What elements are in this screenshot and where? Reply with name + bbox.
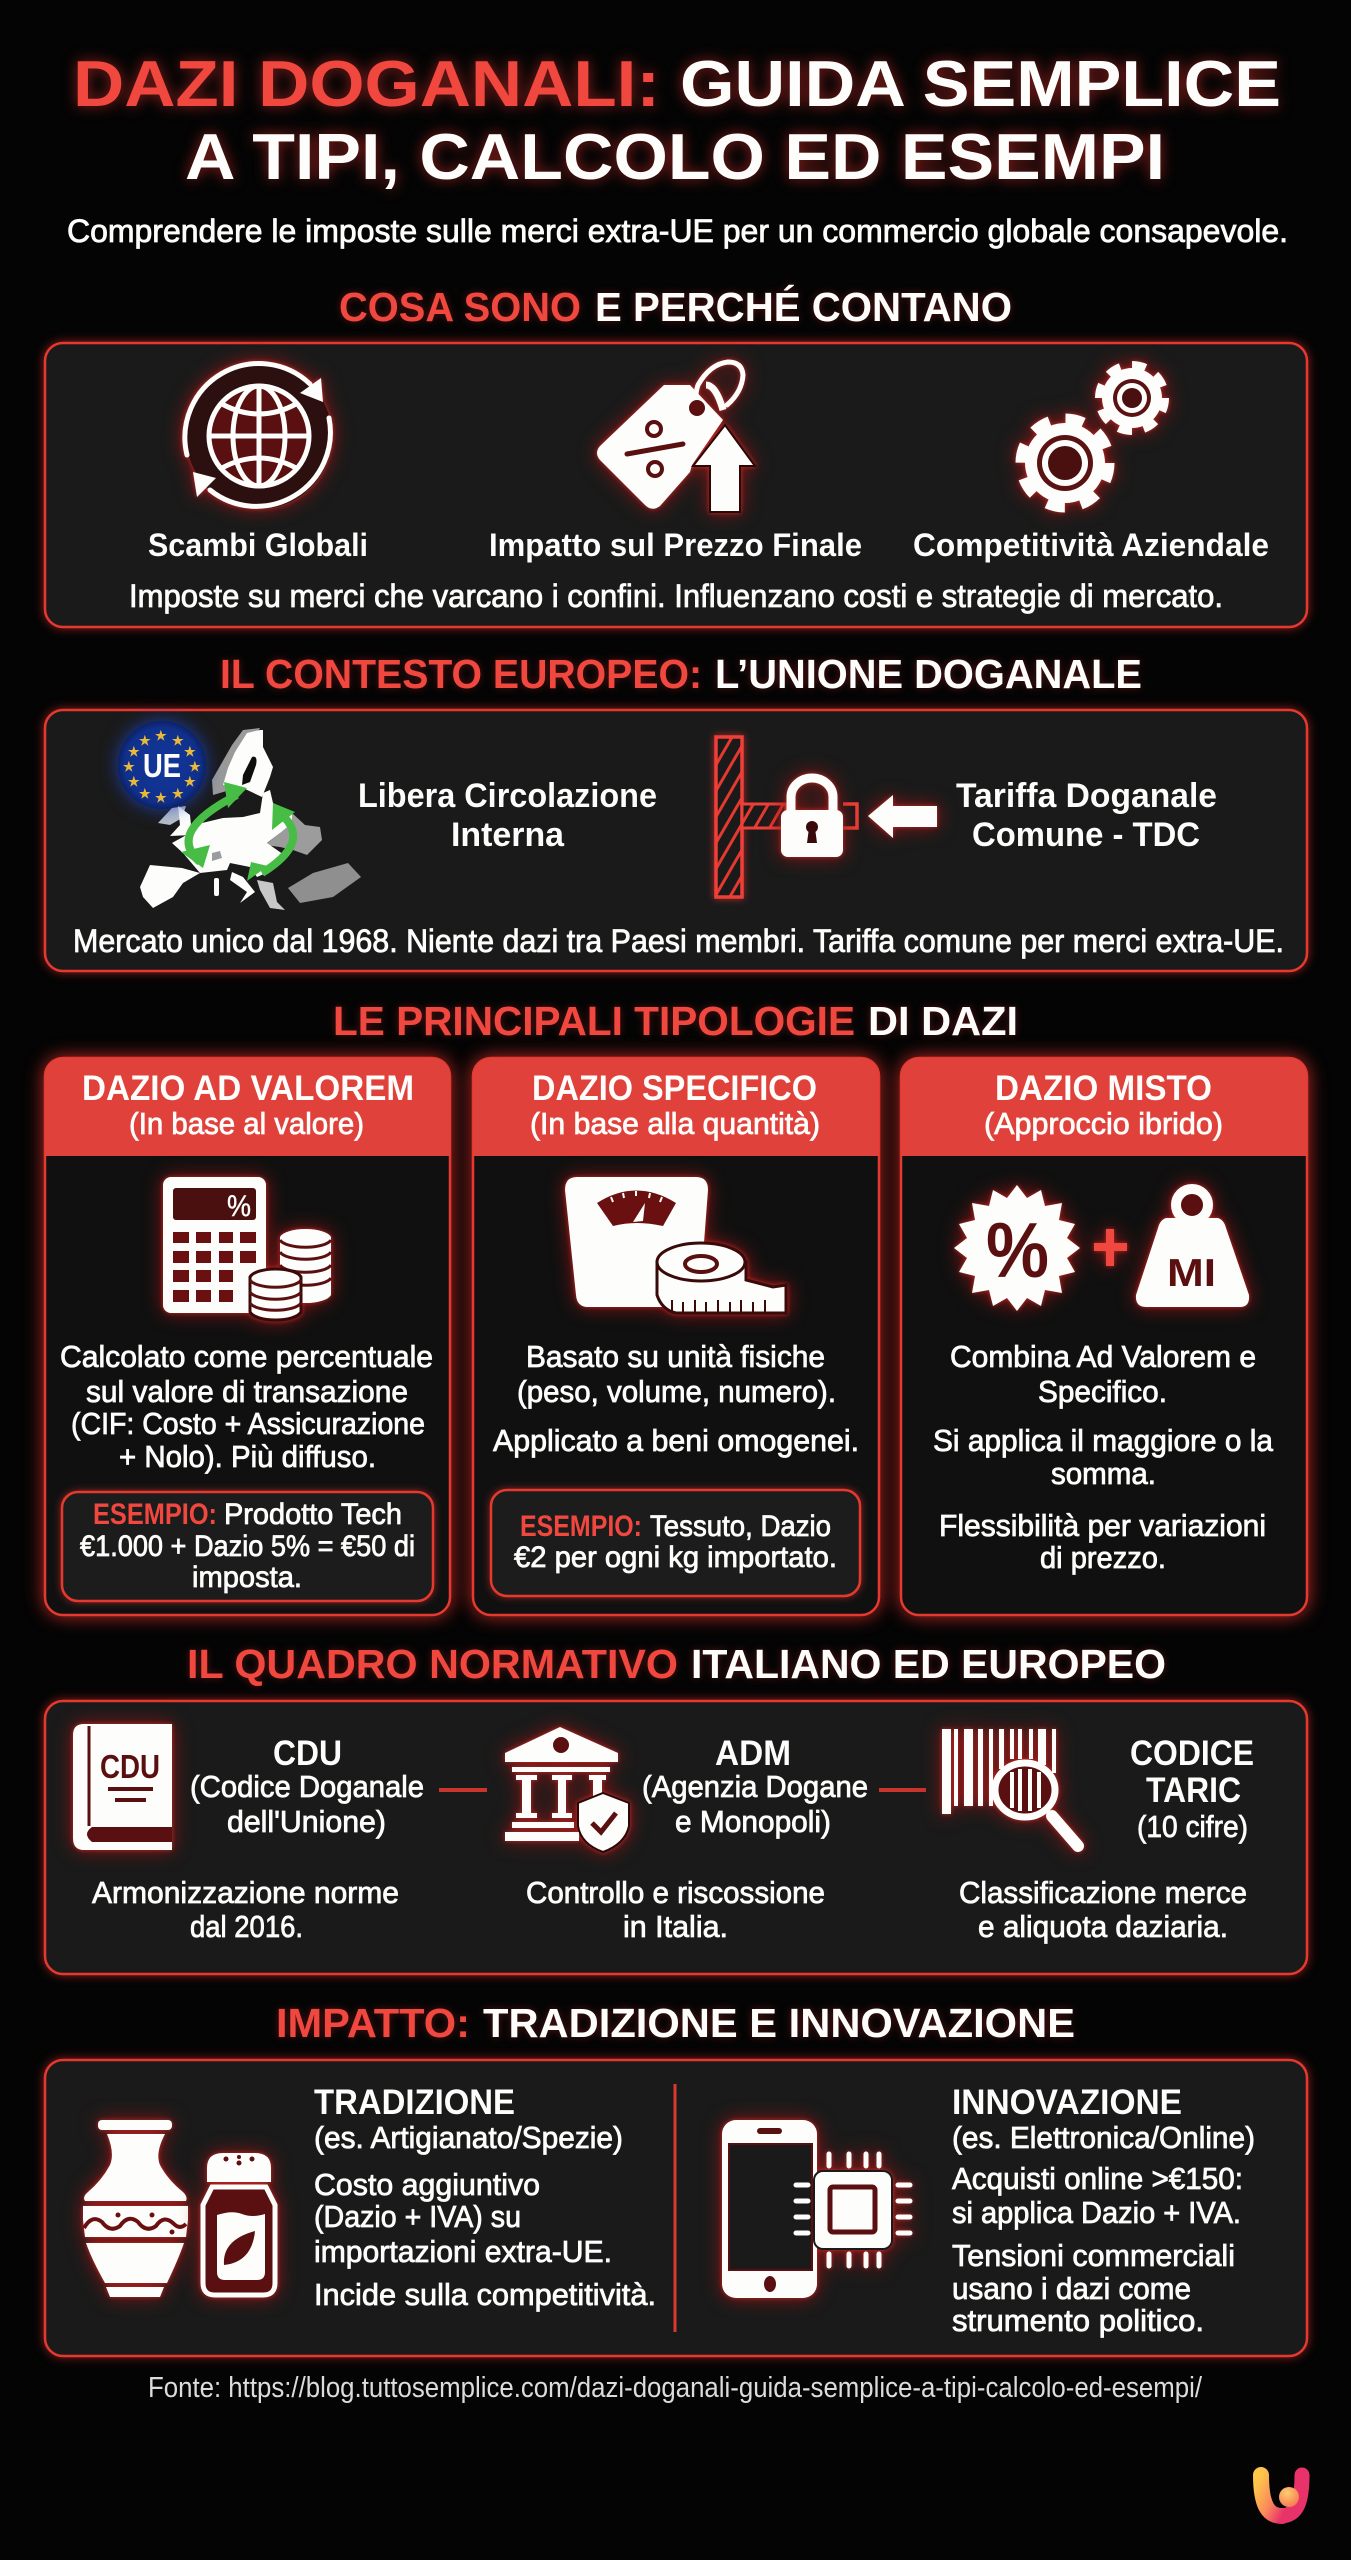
description: CDU: Armonizzazione norme	[92, 1875, 399, 1910]
text: CDU: CDU	[273, 1734, 342, 1773]
body text: Flessibilità per variazioni	[939, 1508, 1266, 1543]
heading: contesto europeo	[220, 651, 1142, 697]
text: innovazione: Tensioni commerciali	[952, 2238, 1235, 2273]
card header: (In base alla quantità)	[530, 1106, 820, 1141]
title	[73, 47, 1281, 193]
icon: eu flag: ★	[128, 774, 140, 789]
body text: Calcolato come percentuale	[60, 1339, 433, 1374]
heading: quadro normativo: IL QUADRO NORMATIVO	[187, 1641, 678, 1687]
card header: (In base al valore)	[129, 1106, 364, 1141]
heading: cosa sono: COSA SONO	[339, 284, 581, 330]
text: CDU	[190, 1734, 424, 1839]
text: libera circolazione: Interna	[451, 816, 565, 854]
card: dazio specifico	[473, 1058, 879, 1615]
description: TARIC	[959, 1875, 1247, 1944]
description: CDU	[92, 1875, 399, 1944]
icon: smartphone with chip	[722, 2120, 910, 2298]
panel: contesto europeo	[45, 710, 1307, 971]
icon: price tag with arrow	[597, 362, 755, 512]
heading: quadro normativo	[187, 1641, 1166, 1687]
card: dazio misto	[901, 1058, 1307, 1615]
icon: globe with arrows	[185, 363, 332, 509]
text: codice TARIC: (10 cifre)	[1137, 1809, 1248, 1844]
example box: €1.000 + Dazio 5% = €50 di	[80, 1530, 415, 1563]
text: innovazione: si applica Dazio + IVA.	[952, 2195, 1241, 2230]
icon: green circulation arrows	[181, 782, 295, 881]
icon: percent badge plus weight: %	[986, 1206, 1049, 1294]
heading: tipologie: LE PRINCIPALI TIPOLOGIE	[333, 998, 855, 1044]
icon: eu flag: ★	[123, 759, 135, 774]
icon: customs building with shield	[505, 1727, 629, 1852]
card header: DAZIO SPECIFICO	[532, 1069, 817, 1108]
icon: percent badge plus weight	[954, 1185, 1249, 1311]
text: ADM: ADM	[715, 1734, 791, 1773]
icon: barrier with lock	[716, 737, 937, 897]
icon: CDU book: CDU	[100, 1748, 160, 1785]
text: codice TARIC: TARIC	[1146, 1771, 1241, 1810]
panel: impatto	[45, 2060, 1307, 2356]
text: innovazione	[952, 2083, 1255, 2338]
text: tradizione: Incide sulla competitività.	[314, 2277, 656, 2312]
heading: impatto: IMPATTO:	[276, 2000, 470, 2046]
icon: eu flag: ★	[128, 744, 140, 759]
example box	[62, 1492, 433, 1601]
text: innovazione: strumento politico.	[952, 2303, 1204, 2338]
icon: spice shaker	[203, 2153, 275, 2295]
panel: cosa sono	[45, 343, 1307, 627]
example box	[491, 1490, 860, 1596]
icon: CDU book	[73, 1724, 172, 1850]
body text: Combina Ad Valorem e	[950, 1339, 1256, 1374]
card header	[82, 1069, 414, 1141]
example box: Prodotto Tech	[224, 1498, 402, 1531]
body text: sul valore di transazione	[86, 1374, 408, 1409]
divider	[674, 2084, 676, 2332]
text: codice TARIC	[1130, 1734, 1254, 1844]
body text: Basato su unità fisiche	[526, 1339, 825, 1374]
description: TARIC: e aliquota daziaria.	[978, 1909, 1228, 1944]
description: ADM: in Italia.	[623, 1909, 728, 1944]
text: tradizione: (Dazio + IVA) su	[314, 2199, 521, 2234]
heading: cosa sono: E PERCHÉ CONTANO	[595, 284, 1012, 330]
text: tradizione	[314, 2083, 656, 2312]
icon: eu flag: ★	[139, 733, 151, 748]
icon: barcode with magnifier	[942, 1729, 1078, 1846]
icon: calculator and coins: %	[227, 1190, 251, 1223]
title: GUIDA SEMPLICE	[680, 47, 1281, 120]
card header: (Approccio ibrido)	[984, 1106, 1223, 1141]
label: impatto sul prezzo: Impatto sul Prezzo Finale	[489, 527, 862, 563]
description: ADM: Controllo e riscossione	[526, 1875, 825, 1910]
text: tradizione: TRADIZIONE	[314, 2083, 515, 2122]
connector	[879, 1788, 926, 1792]
heading: quadro normativo: ITALIANO ED EUROPEO	[691, 1641, 1166, 1687]
icon: eu flag: ★	[172, 786, 184, 801]
example box: Tessuto, Dazio	[650, 1510, 831, 1543]
heading: cosa sono	[339, 284, 1012, 330]
label: competitività: Competitività Aziendale	[913, 527, 1269, 563]
text: tradizione: (es. Artigianato/Spezie)	[314, 2120, 623, 2155]
text: ADM: e Monopoli)	[675, 1804, 831, 1839]
card header: DAZIO AD VALOREM	[82, 1069, 414, 1108]
icon: scale and tape measure	[565, 1177, 786, 1313]
text: innovazione: (es. Elettronica/Online)	[952, 2120, 1255, 2155]
text: codice TARIC: CODICE	[1130, 1734, 1254, 1773]
body text: somma.	[1051, 1456, 1156, 1491]
text: tariffa doganale: Comune - TDC	[972, 816, 1200, 854]
text: CDU: (Codice Doganale	[190, 1769, 424, 1804]
card: dazio ad valorem	[45, 1058, 450, 1615]
text: ADM: (Agenzia Dogane	[642, 1769, 868, 1804]
body text: (CIF: Costo + Assicurazione	[71, 1406, 425, 1441]
example box: €2 per ogni kg importato.	[514, 1541, 837, 1574]
heading: tipologie: DI DAZI	[868, 998, 1018, 1044]
text: libera circolazione	[358, 777, 657, 854]
title: A TIPI, CALCOLO ED ESEMPI	[185, 120, 1165, 193]
heading: contesto europeo: IL CONTESTO EUROPEO:	[220, 651, 702, 697]
text: tariffa doganale: Tariffa Doganale	[956, 777, 1217, 815]
example box: ESEMPIO:	[93, 1498, 217, 1531]
description: TARIC: Classificazione merce	[959, 1875, 1247, 1910]
panel: quadro normativo	[45, 1701, 1307, 1974]
icon: eu flag: UE	[143, 747, 181, 784]
body text: di prezzo.	[1040, 1540, 1166, 1575]
icon: calculator and coins	[163, 1177, 331, 1320]
icon: eu flag	[118, 721, 206, 809]
icon: eu flag: ★	[139, 786, 151, 801]
heading: impatto: TRADIZIONE E INNOVAZIONE	[483, 2000, 1075, 2046]
text: tariffa doganale	[956, 777, 1217, 854]
description: ADM	[526, 1875, 825, 1944]
body text: Specifico.	[1038, 1374, 1167, 1409]
body text	[933, 1339, 1274, 1575]
description: CDU: dal 2016.	[190, 1909, 303, 1944]
example box: imposta.	[192, 1561, 302, 1594]
icon: vase	[83, 2120, 188, 2297]
icon: gears	[1022, 366, 1164, 506]
body text	[493, 1339, 859, 1458]
body text: Applicato a beni omogenei.	[493, 1423, 859, 1458]
description: Imposte su merci che varcano i confini. Influenzano costi e strategie di mercato.	[129, 578, 1223, 614]
icon: eu flag: ★	[155, 728, 167, 743]
title: DAZI DOGANALI:	[73, 47, 660, 120]
heading: contesto europeo: L’UNIONE DOGANALE	[715, 651, 1142, 697]
body text: + Nolo). Più diffuso.	[119, 1439, 376, 1474]
text: innovazione: INNOVAZIONE	[952, 2083, 1182, 2122]
icon: eu flag: ★	[184, 744, 196, 759]
description: Mercato unico dal 1968. Niente dazi tra Paesi membri. Tariffa comune per merci extra-UE.	[73, 923, 1284, 959]
body text: (peso, volume, numero).	[517, 1374, 836, 1409]
label: scambi globali: Scambi Globali	[148, 527, 368, 563]
icon: europe map	[118, 721, 361, 910]
source line: Fonte: https://blog.tuttosemplice.com/dazi-doganali-guida-semplice-a-tipi-calcolo-ed-esempi/	[148, 2372, 1203, 2404]
text: libera circolazione: Libera Circolazione	[358, 777, 657, 815]
logo	[1261, 2475, 1302, 2516]
icon: eu flag: ★	[155, 790, 167, 805]
text: innovazione: usano i dazi come	[952, 2271, 1191, 2306]
connector	[439, 1788, 487, 1792]
icon: eu flag: ★	[189, 759, 201, 774]
text: ADM	[642, 1734, 868, 1839]
card header	[530, 1069, 820, 1141]
body text: Si applica il maggiore o la	[933, 1423, 1274, 1458]
body text	[60, 1339, 433, 1474]
text: tradizione: Costo aggiuntivo	[314, 2167, 540, 2202]
text: tradizione: importazioni extra-UE.	[314, 2234, 612, 2269]
card header	[984, 1069, 1223, 1141]
icon: eu flag: ★	[184, 774, 196, 789]
icon: percent badge plus weight: MI	[1167, 1252, 1216, 1295]
text: innovazione: Acquisti online >€150:	[952, 2161, 1243, 2196]
card header: DAZIO MISTO	[995, 1069, 1212, 1108]
icon: arrow pointing left	[868, 795, 937, 838]
subtitle: Comprendere le imposte sulle merci extra-UE per un commercio globale consapevole.	[67, 213, 1288, 249]
icon: eu flag: ★	[172, 733, 184, 748]
text: CDU: dell'Unione)	[227, 1804, 386, 1839]
example box: ESEMPIO:	[520, 1510, 642, 1543]
